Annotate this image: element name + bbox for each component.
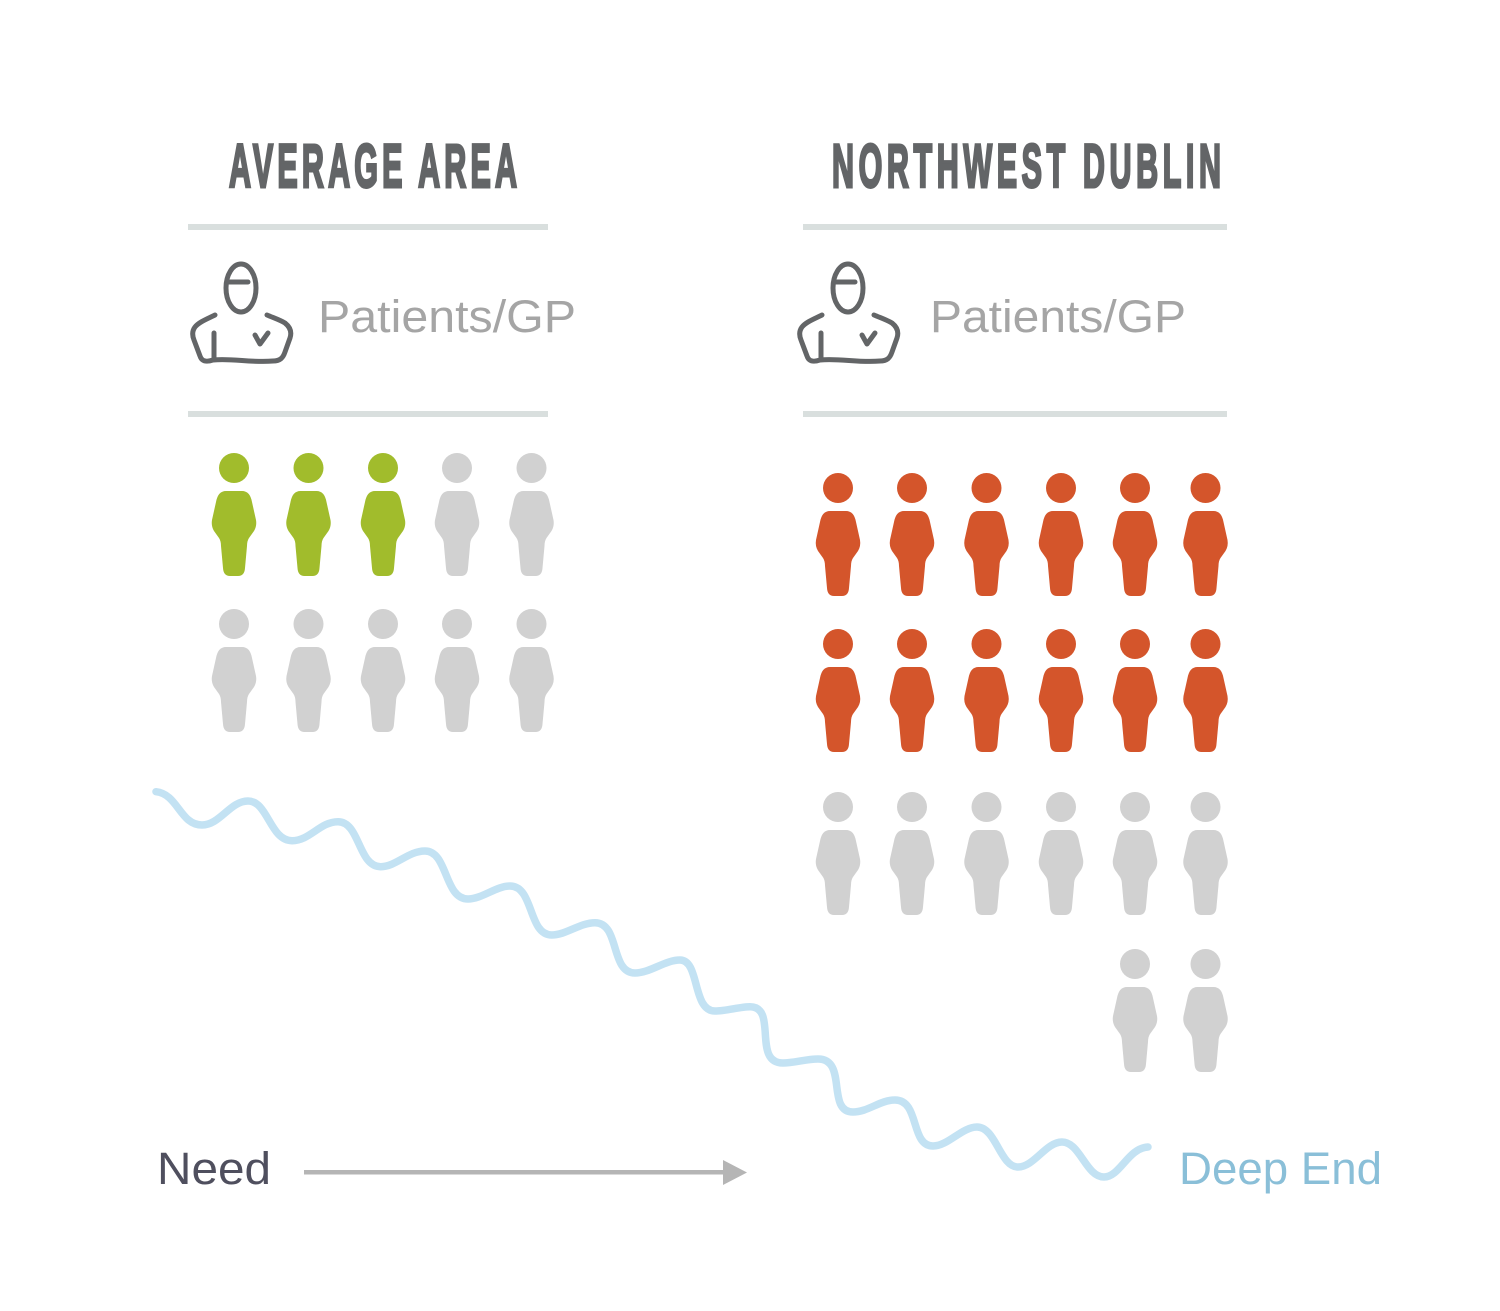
title: average area: AVERAGE AREA	[229, 133, 517, 201]
label: need: Need	[157, 1143, 271, 1194]
icon: GP left	[193, 264, 291, 361]
arrow: need increasing	[304, 1160, 747, 1185]
label: patients per GP right: Patients/GP	[930, 291, 1186, 342]
icon: GP right	[800, 264, 898, 361]
label: deep end: Deep End	[1179, 1143, 1382, 1194]
wavy line: deep end gradient	[156, 792, 1148, 1177]
pictogram: average area patients	[212, 453, 554, 732]
label: patients per GP left: Patients/GP	[318, 291, 576, 342]
pictogram: northwest dublin patients	[816, 473, 1228, 1072]
title: northwest dublin: NORTHWEST DUBLIN	[832, 133, 1221, 201]
